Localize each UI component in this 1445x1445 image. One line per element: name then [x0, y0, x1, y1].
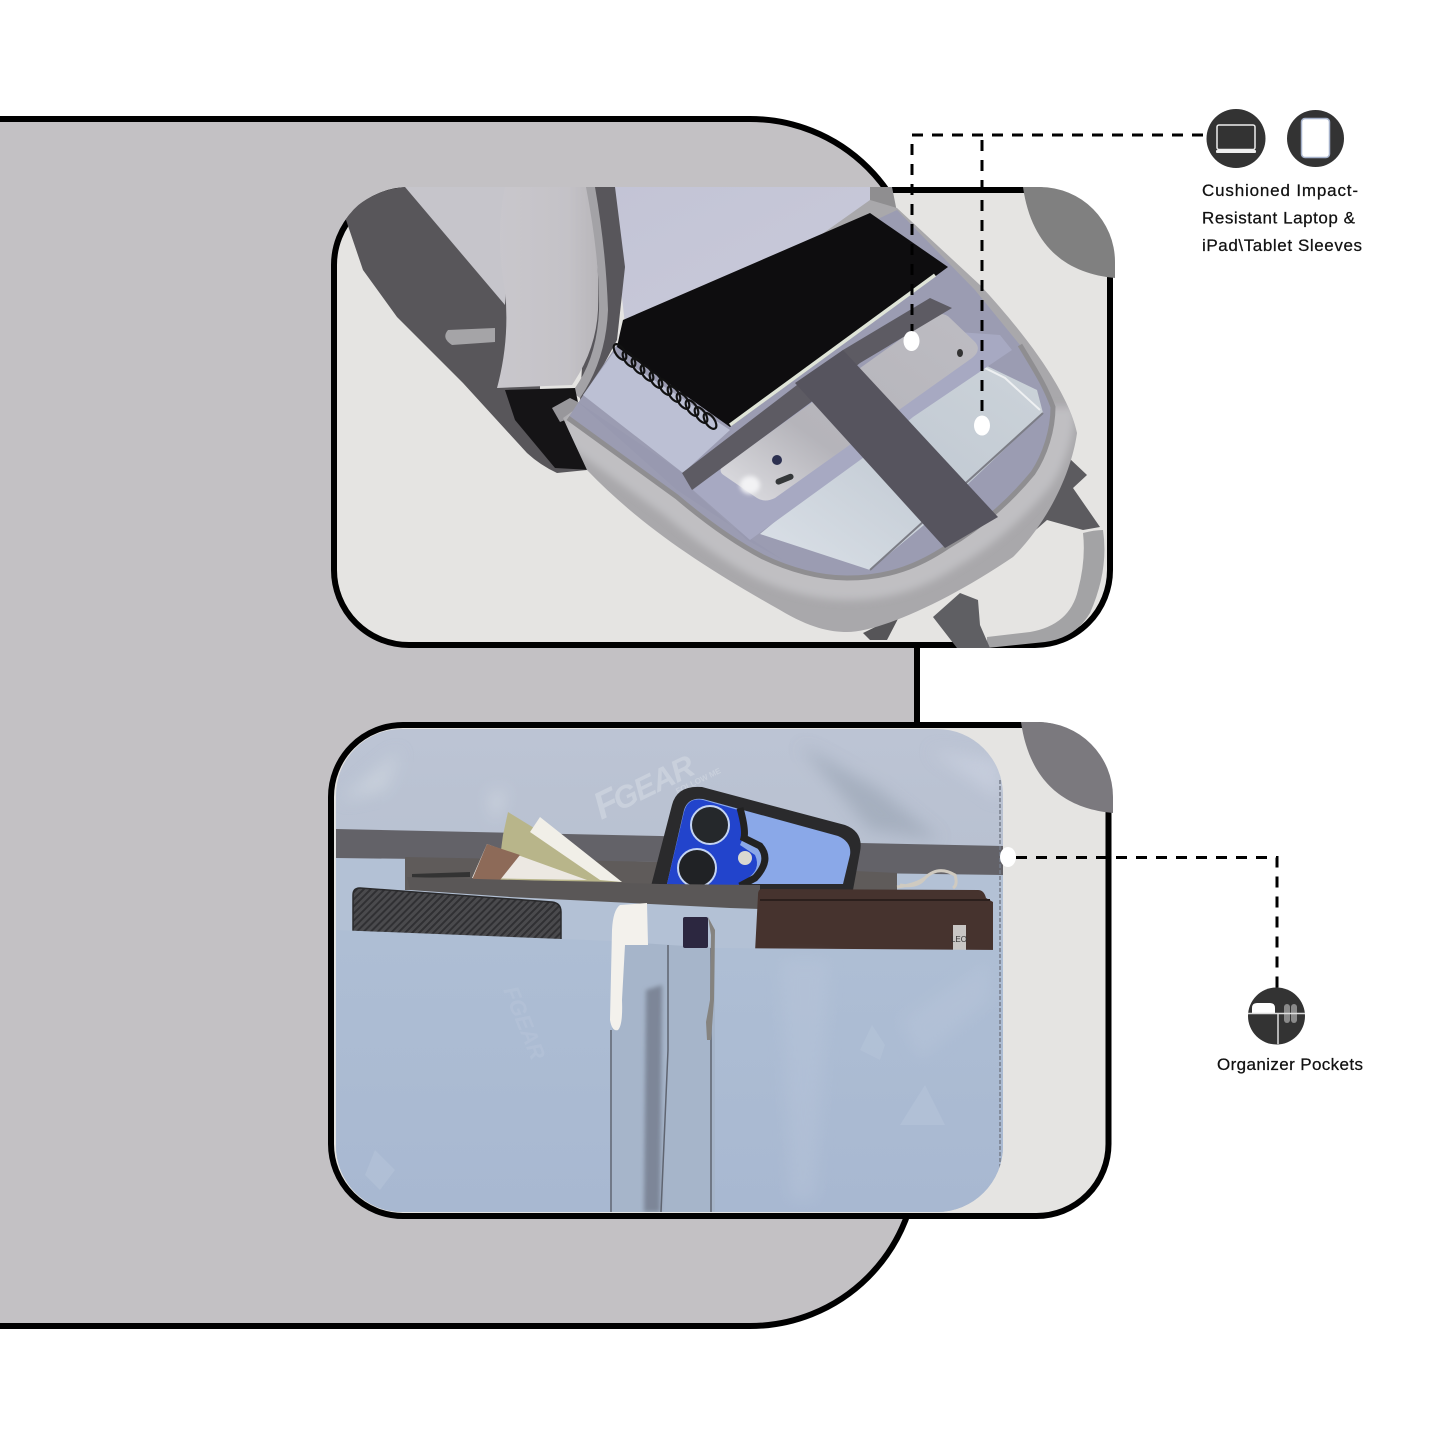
logo watermark: F: [587, 779, 628, 828]
brown wallet: [755, 889, 993, 952]
photo: organizer interior: [336, 729, 1003, 1212]
dark pen with clip: [683, 917, 715, 1040]
left pocket: [336, 930, 612, 1212]
bag shell: [563, 200, 1077, 632]
marker dot: laptop: [974, 416, 990, 436]
feature label: organizer pockets: Organizer Pockets: [1217, 1055, 1363, 1074]
shell interior lining: [568, 210, 1053, 578]
black power bank: [353, 888, 561, 940]
panel: laptop compartment: [334, 187, 1115, 648]
feature label: cushioned sleeves: Resistant Laptop &: [1202, 208, 1356, 228]
pocket watermark marks: FGEAR: [498, 983, 550, 1063]
marker dot: organizer pockets: [1000, 847, 1016, 867]
left padded section: [583, 353, 730, 472]
right pocket: [715, 948, 1003, 1212]
camera lenses: [691, 806, 729, 844]
feature label: cushioned sleeves: Cushioned Impact-: [1202, 181, 1358, 200]
inner back light panel: [405, 187, 510, 305]
zip pocket backing: [405, 857, 897, 890]
lining creases: [363, 756, 994, 838]
lower lining: [336, 857, 1003, 960]
banknotes: [472, 812, 622, 882]
panel background: [334, 190, 1110, 645]
flap with zipper: [445, 187, 625, 470]
top fabric and zipper pull: [870, 187, 896, 208]
pocket watermark marks: [365, 983, 945, 1190]
logo watermark: FOLLOW ME: [674, 766, 723, 796]
icon: tablet: [1287, 110, 1344, 167]
zipper track: [568, 345, 1053, 578]
back panel dark strap: [345, 187, 587, 473]
dashed leader: laptop and tablet callouts: [912, 135, 1203, 416]
zipper tape: [407, 877, 760, 909]
corner leaf accent: [1021, 722, 1113, 813]
spiral binding: [611, 342, 719, 431]
corner leaf accent: [1023, 187, 1115, 278]
dashed leader: organizer pockets: [1016, 858, 1277, 988]
logo watermark: [595, 756, 721, 820]
logo watermark: GEAR: [607, 748, 701, 818]
webbing band: [336, 829, 1003, 875]
icon: organizer pockets: [1248, 988, 1305, 1044]
brown wallet: LEO: [951, 935, 967, 944]
panel background: [331, 725, 1108, 1216]
elastic band across tablet: [682, 298, 952, 490]
lining behind notebook: [610, 187, 880, 325]
key hook: [897, 871, 956, 888]
phone: [650, 787, 861, 890]
background grey rounded shape: [0, 119, 917, 1326]
pocket sheen: [780, 960, 990, 1200]
vertical elastic strap: [795, 350, 998, 548]
tablet: [721, 314, 978, 500]
photo: open backpack with laptop and tablet: [345, 187, 1104, 648]
notebook: [611, 213, 948, 431]
laptop: [760, 365, 1043, 570]
right edge stitching: [999, 780, 1001, 1190]
panel: organizer pockets: [331, 722, 1113, 1216]
marker dot: tablet: [904, 331, 920, 351]
handle strap and loop: [863, 458, 1104, 648]
centre pen pockets: [611, 941, 715, 1212]
pocket sheet: [693, 330, 1012, 540]
lining background: [336, 729, 1003, 1212]
feature label: cushioned sleeves: iPad\Tablet Sleeves: [1202, 236, 1362, 255]
white pen: [610, 903, 648, 1030]
icon: laptop: [1206, 109, 1266, 168]
shell highlight: [568, 407, 1053, 578]
